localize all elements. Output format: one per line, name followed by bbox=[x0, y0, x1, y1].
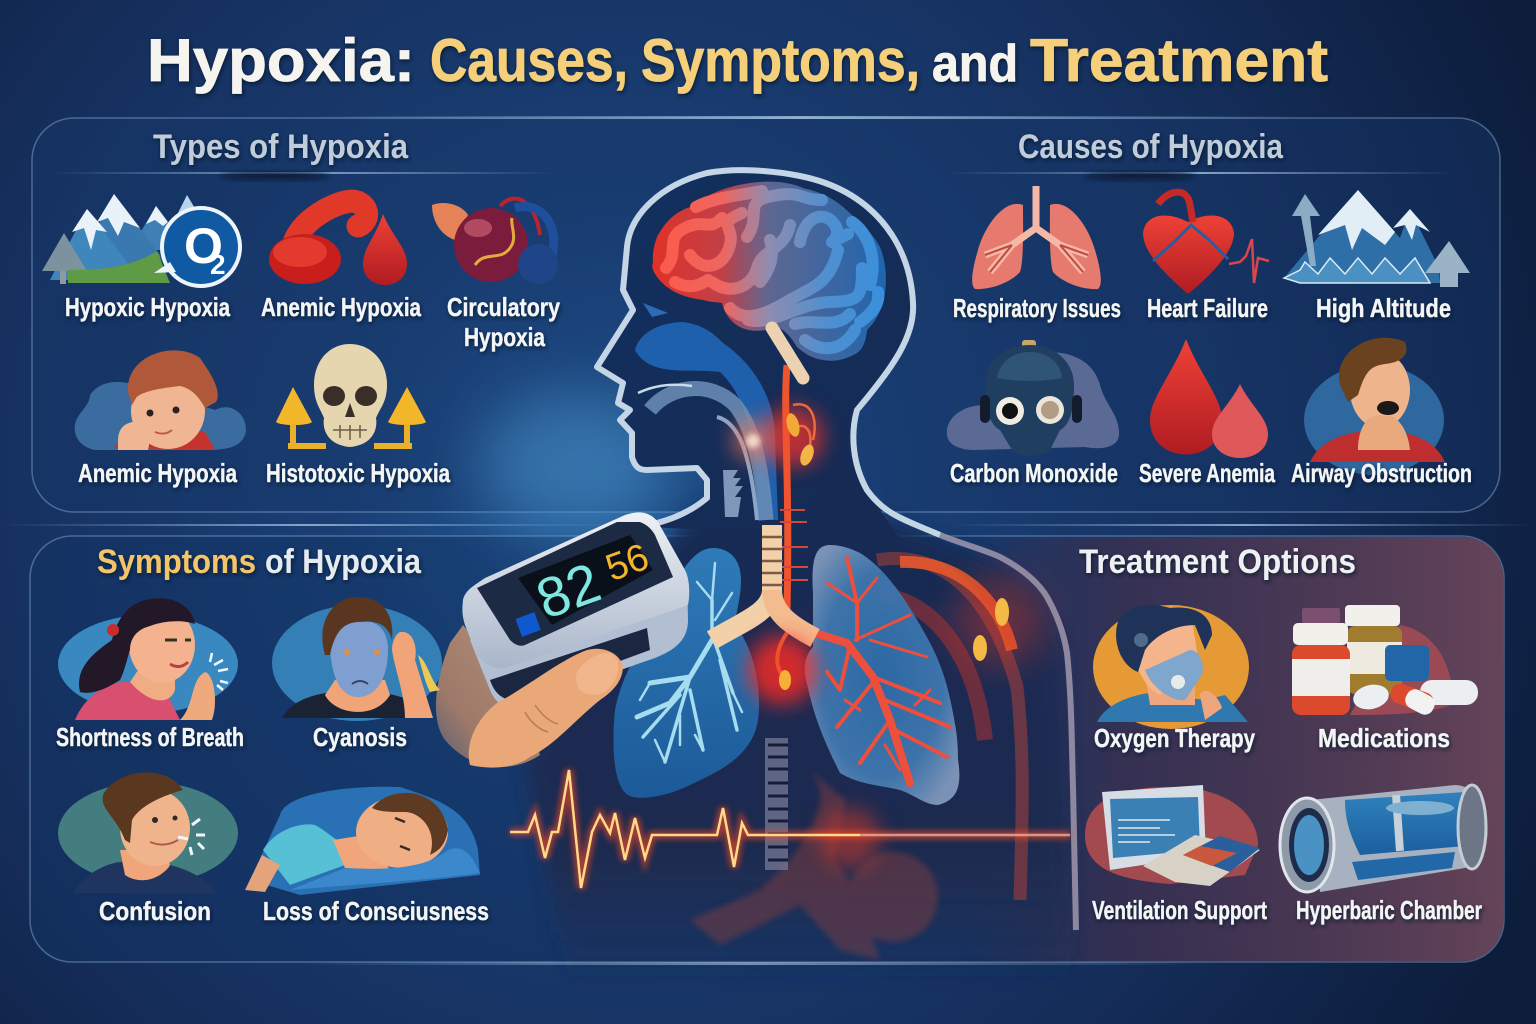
labels: causes: Severe Anemia bbox=[1139, 458, 1275, 488]
abdominal glow bbox=[820, 808, 880, 868]
icon: cyanosis man bbox=[272, 597, 442, 721]
central anatomy figure bbox=[525, 170, 1076, 985]
device body bbox=[462, 512, 689, 668]
brain bbox=[652, 182, 886, 378]
labels: types: Hypoxia bbox=[464, 322, 545, 352]
labels: types: Hypoxic Hypoxia bbox=[65, 292, 230, 322]
title: Hypoxia: bbox=[147, 27, 415, 94]
device lower shell bbox=[470, 575, 688, 707]
head and shoulder outline bbox=[597, 170, 1076, 930]
panel: symptoms and treatment frame bbox=[30, 536, 1504, 962]
bezel bbox=[477, 522, 673, 646]
icon: oxygen therapy bbox=[1093, 605, 1249, 729]
title: Treatment bbox=[1030, 27, 1328, 94]
icon: confusion man bbox=[58, 772, 238, 893]
heading: symptoms bbox=[97, 543, 422, 581]
icon: severe anemia drops bbox=[1150, 339, 1268, 458]
heading: types: Types of Hypoxia bbox=[153, 128, 409, 166]
trachea bbox=[712, 525, 815, 640]
icon: high altitude bbox=[1284, 190, 1470, 287]
labels: symptoms: Confusion bbox=[99, 896, 211, 926]
right shoulder vessels bbox=[877, 559, 1045, 900]
labels: causes: Airway Obstruction bbox=[1291, 458, 1472, 488]
labels: types: Anemic Hypoxia bbox=[78, 458, 237, 488]
icon: ventilation support bbox=[1085, 785, 1260, 886]
labels: types: Anemic Hypoxia bbox=[261, 292, 421, 322]
spine bbox=[765, 738, 788, 870]
icon: hypoxic mountains with O2: 2 bbox=[210, 249, 226, 280]
pulse oximeter with finger bbox=[436, 512, 689, 768]
ECG heartbeat line bbox=[510, 770, 1070, 888]
labels: causes: High Altitude bbox=[1316, 293, 1451, 323]
icon: carbon monoxide mask bbox=[947, 340, 1119, 456]
thumb bbox=[469, 649, 623, 768]
labels: symptoms: Cyanosis bbox=[313, 722, 407, 752]
heading: symptoms: Symptoms bbox=[97, 543, 256, 581]
icon: airway obstruction person bbox=[1304, 338, 1445, 475]
screen bbox=[518, 535, 653, 625]
panel: treatment tint bbox=[960, 537, 1503, 961]
title bbox=[147, 27, 1328, 94]
title: Symptoms, bbox=[641, 27, 920, 94]
neck glow and vessels bbox=[732, 365, 823, 610]
icon: lungs bbox=[972, 186, 1101, 289]
heading: causes: Causes of Hypoxia bbox=[1018, 128, 1284, 166]
icon: anemic child bbox=[75, 350, 246, 450]
icon: heart failure bbox=[1143, 192, 1269, 294]
labels: causes: Carbon Monoxide bbox=[950, 458, 1118, 488]
chest glow with node bbox=[748, 633, 816, 704]
airway and sinus bbox=[635, 303, 778, 520]
heading: symptoms: of Hypoxia bbox=[265, 543, 422, 581]
labels: treatment: Medications bbox=[1318, 723, 1450, 753]
dark band bbox=[490, 628, 650, 699]
labels: types: Histotoxic Hypoxia bbox=[266, 458, 450, 488]
reading: 56: 56 bbox=[600, 536, 654, 590]
title: and bbox=[932, 35, 1018, 93]
power button bbox=[516, 612, 541, 637]
glow behind face bbox=[480, 395, 670, 535]
thumbnail bbox=[576, 653, 618, 695]
icon: shortness of breath woman bbox=[58, 598, 238, 720]
icon: circulatory bbox=[432, 199, 558, 284]
abdominal organs bbox=[690, 770, 938, 960]
labels: treatment: Oxygen Therapy bbox=[1094, 723, 1255, 753]
heading: treatment: Treatment Options bbox=[1079, 543, 1356, 581]
title: Causes, bbox=[430, 27, 628, 94]
panel: types and causes frame bbox=[32, 118, 1500, 512]
labels: treatment bbox=[1092, 723, 1482, 925]
icon: hyperbaric chamber bbox=[1280, 785, 1488, 892]
icon: hypoxic mountains with O2: O bbox=[184, 218, 223, 274]
labels: treatment: Ventilation Support bbox=[1092, 895, 1267, 925]
labels: types: Circulatory bbox=[447, 292, 560, 322]
hand bbox=[436, 625, 540, 767]
lung: left blue bbox=[613, 548, 759, 798]
icon: loss of consciousness bbox=[245, 787, 480, 895]
icon: skull with arrows bbox=[276, 344, 426, 447]
head silhouette bbox=[597, 170, 913, 540]
icon: medications bbox=[1292, 605, 1478, 718]
labels: symptoms: Shortness of Breath bbox=[56, 722, 244, 752]
labels: causes bbox=[950, 293, 1472, 488]
labels: causes: Heart Failure bbox=[1147, 293, 1268, 323]
labels: types bbox=[65, 292, 560, 488]
reading: 82: 82 bbox=[528, 550, 608, 631]
labels: causes: Respiratory Issues bbox=[953, 293, 1121, 323]
icon: anemic red cells bbox=[269, 201, 407, 285]
labels: symptoms: Loss of Consciusness bbox=[263, 896, 489, 926]
lung: right red bbox=[805, 545, 959, 805]
icon: hypoxic mountains with O2 bbox=[42, 194, 240, 286]
chest bbox=[525, 505, 1070, 985]
labels: symptoms bbox=[56, 722, 489, 926]
